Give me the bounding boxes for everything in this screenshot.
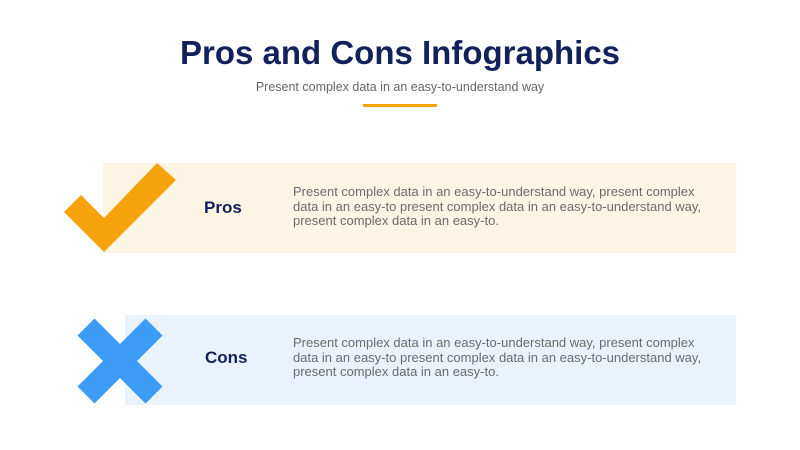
text: pros: data in an easy-to present complex data in an easy-to-understand way, (293, 198, 701, 214)
heading: cons: Cons (205, 348, 248, 367)
accent underline (363, 104, 437, 107)
text: cons: data in an easy-to present complex data in an easy-to-understand way, (293, 350, 701, 364)
panel: pros (103, 163, 736, 253)
text: cons: present complex data in an easy-to. (293, 364, 499, 379)
text: cons (293, 335, 701, 379)
text: cons: Present complex data in an easy-to-understand way, present complex (293, 335, 695, 350)
panel: cons (125, 315, 736, 405)
subtitle: Present complex data in an easy-to-understand way (256, 80, 544, 94)
text: pros (293, 184, 701, 228)
text: pros: Present complex data in an easy-to-understand way, present complex (293, 184, 695, 199)
text: pros: present complex data in an easy-to. (293, 213, 499, 228)
title: Pros and Cons Infographics (180, 34, 620, 71)
heading: pros: Pros (204, 198, 242, 217)
